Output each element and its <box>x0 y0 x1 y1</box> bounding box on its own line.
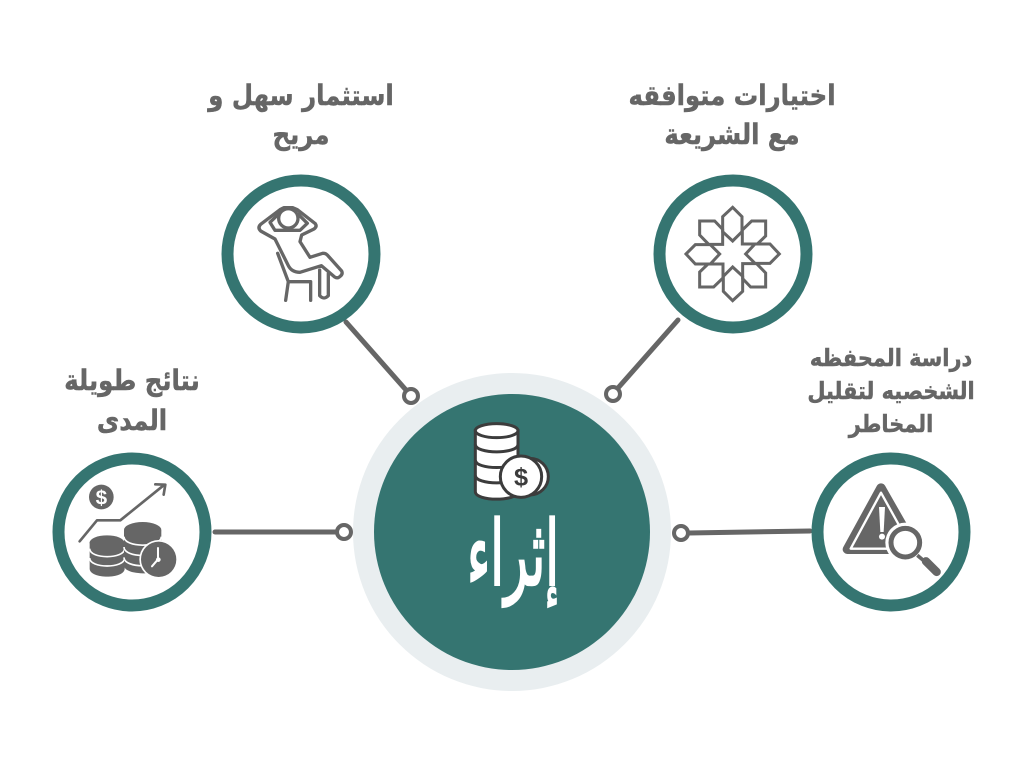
badge ring <box>660 180 806 328</box>
heading: easy investment: استثمار سهل و <box>206 80 394 112</box>
icon: relaxing man in chair <box>259 208 342 300</box>
heading: easy investment <box>206 80 394 151</box>
connector: left <box>215 530 336 534</box>
heading: portfolio risk study: دراسة المحفظه <box>810 345 972 372</box>
panel: easy investment <box>206 80 394 328</box>
heading: sharia compliant: مع الشريعة <box>664 119 800 151</box>
icon: coin stack <box>475 424 548 499</box>
heading: long term results: نتائج طويلة <box>64 365 200 397</box>
hub outer ring <box>353 373 671 691</box>
connector: top left <box>346 322 406 390</box>
icon: coin stack: $ <box>514 464 528 492</box>
panel: portfolio risk study <box>807 345 975 606</box>
badge ring <box>228 180 374 328</box>
heading: easy investment: مريح <box>273 119 329 151</box>
heading: portfolio risk study <box>807 345 975 438</box>
icon: growth coins and clock <box>80 484 178 579</box>
hub teal disc <box>374 394 650 670</box>
heading: long term results <box>64 365 200 437</box>
hub wordmark: إثراء <box>467 503 559 607</box>
badge ring <box>58 458 206 606</box>
icon: growth coins and clock: $ <box>96 487 108 510</box>
heading: portfolio risk study: الشخصيه لتقليل <box>807 378 975 405</box>
heading: sharia compliant: اختيارات متوافقه <box>628 80 836 112</box>
panel: sharia compliant <box>628 80 836 328</box>
connector dot: top left <box>404 389 418 403</box>
central hub <box>353 373 671 691</box>
badge ring <box>818 458 964 606</box>
heading: long term results: المدى <box>97 405 167 437</box>
panel: long term results <box>58 365 206 606</box>
connector dot: right <box>674 526 688 540</box>
icon: warning triangle and magnifier <box>847 488 937 572</box>
connector dot: left <box>337 525 351 539</box>
icon: islamic star <box>686 207 779 301</box>
connector: top right <box>618 320 678 388</box>
connector dot: top right <box>606 387 620 401</box>
heading: sharia compliant <box>628 80 836 151</box>
heading: portfolio risk study: المخاطر <box>848 411 933 438</box>
connector: right <box>689 531 810 533</box>
